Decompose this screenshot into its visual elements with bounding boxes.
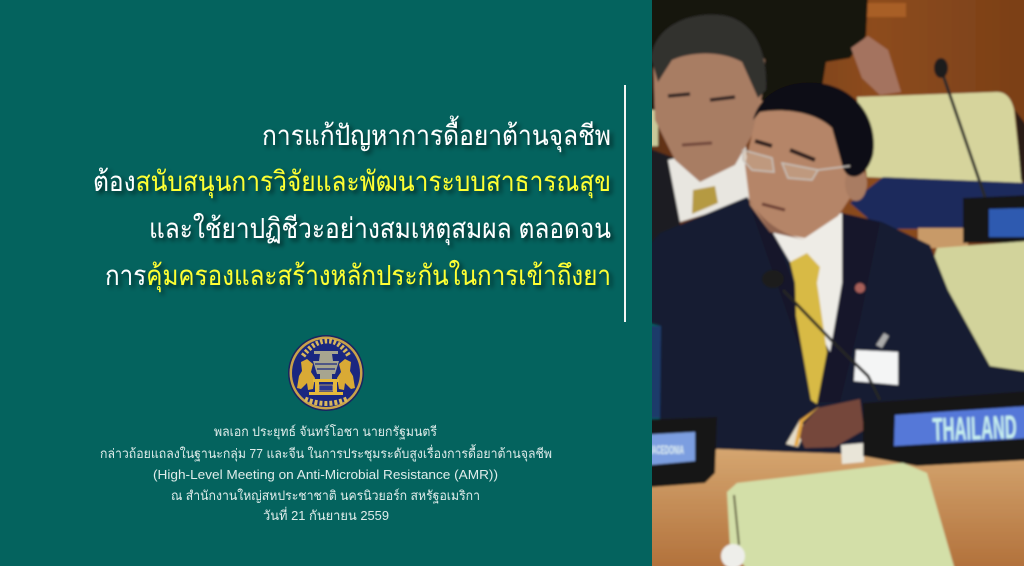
delegate hand and cuff (786, 399, 864, 464)
detail line 3: (High-Level Meeting on Anti-Microbial Resistance (AMR)) (153, 467, 498, 482)
table strip (918, 228, 968, 248)
lower right chair (932, 239, 1024, 374)
front chair (721, 463, 955, 566)
rear delegate (652, 13, 768, 244)
lapel shadow (794, 216, 852, 354)
panel: teal background (0, 0, 652, 566)
detail line 5: วันที่ 21 กันยายน 2559 (263, 507, 389, 523)
left blue chair edge (652, 324, 662, 420)
headline line 1: การแก้ปัญหาการดื้อยาต้านจุลชีพ (262, 115, 611, 153)
headline line 4: การคุ้มครองและสร้างหลักประกันในการเข้าถึงยา (105, 259, 611, 293)
standing person (640, 0, 868, 110)
table (640, 449, 1024, 566)
headline (93, 115, 611, 293)
detail line 1: พลเอก ประยุทธ์ จันทร์โอชา นายกรัฐมนตรี (214, 424, 437, 440)
speaker and event details (100, 424, 552, 523)
glasses (743, 150, 850, 180)
shirt (773, 213, 842, 352)
nameplate Thailand (863, 391, 1024, 466)
small nameplate (963, 195, 1024, 243)
detail line 2: กล่าวถ้อยแถลงในฐานะกลุ่ม 77 และจีน ในการประชุมระดับสูงเรื่องการดื้อยาต้านจุลชีพ (100, 444, 552, 462)
detail line 4: ณ สำนักงานใหญ่สหประชาชาติ นครนิวยอร์ก สหรัฐอเมริกา (171, 488, 480, 504)
name badge (854, 333, 898, 385)
nameplate Macedonia (652, 417, 718, 488)
gold tie (790, 253, 827, 404)
left pale chair strip (652, 108, 660, 148)
headline line 3: และใช้ยาปฏิชีวะอย่างสมเหตุสมผล ตลอดจน (149, 212, 611, 246)
nameplate Macedonia: MACEDONIA (647, 443, 684, 457)
main delegate neck and face (745, 100, 852, 238)
headline line 2: ต้องสนับสนุนการวิจัยและพัฒนาระบบสาธารณสุข (93, 166, 611, 199)
right microphone (934, 58, 985, 197)
wood wall (640, 0, 1024, 260)
blue seat (850, 177, 1024, 229)
vertical divider (624, 85, 626, 322)
eyebrows and mouth (755, 141, 815, 160)
right chair back (857, 92, 1022, 183)
ear (845, 165, 867, 201)
icon: government seal (288, 335, 364, 411)
photo panel: delegates at the meeting (640, 0, 1024, 566)
hair (753, 83, 874, 177)
standing person's hand (851, 36, 901, 95)
main delegate suit (640, 197, 1024, 462)
main microphone (762, 270, 880, 400)
lapel pin (855, 283, 865, 293)
